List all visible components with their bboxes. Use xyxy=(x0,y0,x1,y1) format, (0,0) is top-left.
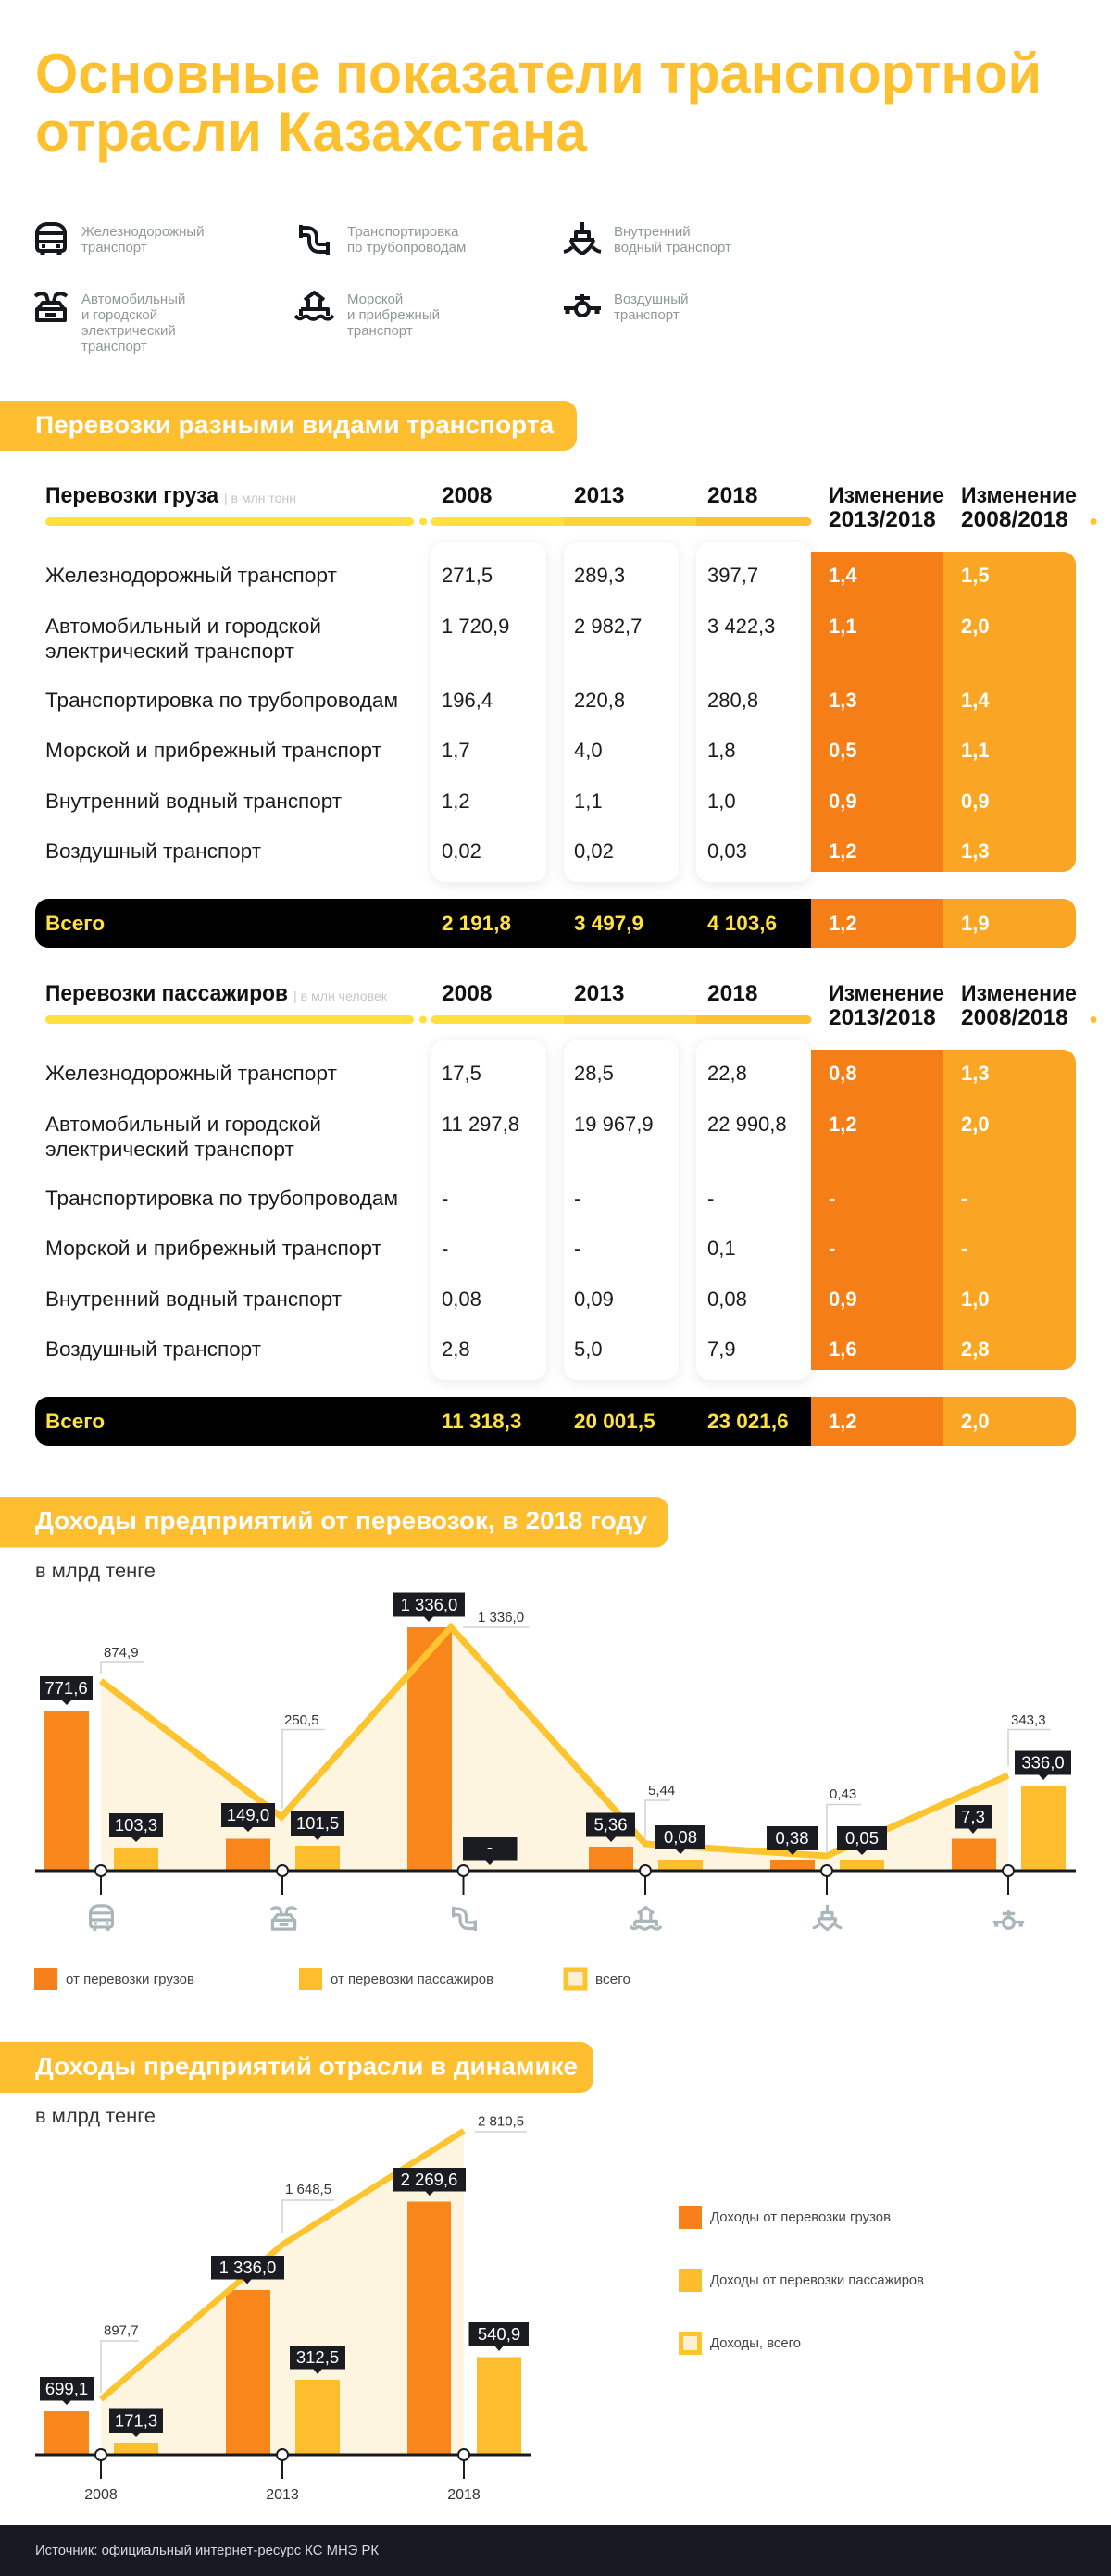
values 2018: - xyxy=(707,1187,714,1210)
row labels: электрический транспорт xyxy=(45,640,294,663)
table header: cargo: 2008 xyxy=(442,483,493,508)
row labels xyxy=(45,1062,398,1361)
table header: passengers: 2013/2018 xyxy=(829,1005,936,1030)
table header: passengers: Перевозки пассажиров xyxy=(45,981,288,1006)
row labels: Воздушный транспорт xyxy=(45,840,261,863)
legend: transport types xyxy=(35,222,731,355)
value tags: 1 336,0 xyxy=(219,2258,276,2277)
change columns xyxy=(811,1050,1076,1370)
footer: source xyxy=(0,2525,1111,2576)
legend item: railway: Железнодорожный xyxy=(81,224,205,240)
line: total xyxy=(101,1627,1008,1856)
values 2018: 0,08 xyxy=(707,1288,747,1311)
values 2013: 1,1 xyxy=(574,790,603,813)
chart legend: revenue 2018: от перевозки грузов xyxy=(66,1972,194,1987)
values 2013: 2 982,7 xyxy=(574,615,642,638)
area: total xyxy=(101,1627,1008,1871)
values 2008: - xyxy=(442,1237,448,1260)
legend item: railway xyxy=(37,224,205,255)
value tags: 312,5 xyxy=(296,2347,339,2367)
value tags: 0,38 xyxy=(775,1828,809,1848)
value tags: 540,9 xyxy=(478,2324,520,2344)
values 2008 xyxy=(442,1062,519,1361)
legend item: railway: транспорт xyxy=(81,240,147,255)
total row: passengers: Всего xyxy=(45,1410,105,1433)
values change 2008/2018: 2,0 xyxy=(961,615,990,638)
values 2013 xyxy=(574,1062,654,1361)
values 2008: 17,5 xyxy=(442,1062,481,1085)
value tags xyxy=(40,2168,529,2437)
total row: passengers: 2,0 xyxy=(961,1410,990,1433)
section heading: revenue 2018: Доходы предприятий от перевозок, в 2018 году xyxy=(35,1507,647,1535)
table header: passengers: Изменение xyxy=(961,981,1077,1006)
values 2013: - xyxy=(574,1187,580,1210)
table header: cargo: Перевозки груза xyxy=(45,483,218,508)
table header: cargo: 2013/2018 xyxy=(829,507,936,532)
callouts: totals: 897,7 xyxy=(104,2323,139,2338)
bars: cargo xyxy=(44,2201,451,2455)
values 2008: 271,5 xyxy=(442,564,493,587)
value tags: 1 336,0 xyxy=(401,1595,457,1614)
values change 2008/2018: 2,0 xyxy=(961,1113,990,1136)
values 2008: - xyxy=(442,1187,448,1210)
year columns xyxy=(431,1040,811,1380)
legend item: sea: Морской xyxy=(347,292,403,307)
total row: cargo xyxy=(35,899,1076,948)
table header: passengers: 2008/2018 xyxy=(961,1005,1068,1030)
line: total xyxy=(101,2131,464,2399)
values 2008: 0,08 xyxy=(442,1288,481,1311)
values 2018: 0,03 xyxy=(707,840,747,863)
values 2008: 11 297,8 xyxy=(442,1113,519,1136)
chart: revenue dynamics xyxy=(35,2114,531,2503)
values change 2013/2018: - xyxy=(829,1187,835,1210)
section heading: revenue 2018 xyxy=(0,1497,668,1548)
legend item: air xyxy=(564,292,688,323)
category icons xyxy=(91,1905,1024,1931)
year labels: 2013 xyxy=(266,2487,299,2503)
row labels: Железнодорожный транспорт xyxy=(45,564,337,587)
values change 2008/2018: 1,5 xyxy=(961,564,990,587)
callouts: totals: 874,9 xyxy=(104,1645,139,1661)
values 2013: 4,0 xyxy=(574,739,603,762)
table header: cargo: 2013 xyxy=(574,483,625,508)
title: отрасли Казахстана xyxy=(35,101,588,163)
callouts: totals: 250,5 xyxy=(284,1712,319,1728)
values change 2008/2018: 1,1 xyxy=(961,739,990,762)
total row: cargo: 4 103,6 xyxy=(707,912,777,935)
table header: cargo: Изменение xyxy=(961,483,1077,508)
section heading: transport by type: Перевозки разными видами транспорта xyxy=(35,411,555,439)
table header: passengers: Изменение xyxy=(829,981,944,1006)
legend item: inland water: Внутренний xyxy=(614,224,691,240)
chart legend: revenue dynamics xyxy=(679,2206,924,2353)
table header: passengers: | в млн человек xyxy=(293,989,387,1003)
legend item: road and electric: Автомобильный xyxy=(81,292,185,307)
values 2018: 22 990,8 xyxy=(707,1113,787,1136)
bars: passengers xyxy=(114,1786,1066,1871)
year labels xyxy=(84,2487,481,2503)
legend item: sea: и прибрежный xyxy=(347,307,440,323)
values 2008: 1,2 xyxy=(442,790,470,813)
row labels: Автомобильный и городской xyxy=(45,615,321,638)
callouts: totals: 5,44 xyxy=(648,1783,675,1798)
callouts: totals: 343,3 xyxy=(1011,1712,1046,1728)
legend item: road and electric: транспорт xyxy=(81,339,147,355)
section heading: revenue dynamics: Доходы предприятий отрасли в динамике xyxy=(35,2053,578,2081)
values 2008: 1,7 xyxy=(442,739,470,762)
values 2013: 28,5 xyxy=(574,1062,614,1085)
values change 2008/2018: 1,3 xyxy=(961,840,990,863)
values change 2008/2018: - xyxy=(961,1187,967,1210)
table: passengers xyxy=(35,981,1096,1446)
legend item: road and electric xyxy=(35,292,185,355)
callouts: totals: 1 336,0 xyxy=(478,1610,524,1625)
value tags: 149,0 xyxy=(227,1805,269,1824)
values 2018: 22,8 xyxy=(707,1062,747,1085)
row labels: Внутренний водный транспорт xyxy=(45,790,342,813)
values 2013: 0,09 xyxy=(574,1288,614,1311)
title xyxy=(35,43,1042,163)
chart: revenue 2018 xyxy=(35,1592,1076,1931)
values change 2013/2018: 0,9 xyxy=(829,1288,857,1311)
values 2008: 196,4 xyxy=(442,689,493,712)
chart legend: revenue 2018 xyxy=(34,1968,630,1990)
table header: cargo: | в млн тонн xyxy=(224,492,296,505)
values change 2008/2018: 1,0 xyxy=(961,1288,990,1311)
values change 2013/2018: 1,6 xyxy=(829,1338,857,1361)
values change 2013/2018: 0,5 xyxy=(829,739,857,762)
chart legend: revenue dynamics: Доходы, всего xyxy=(710,2336,801,2351)
values 2018 xyxy=(707,564,775,863)
legend item: inland water xyxy=(564,222,731,255)
legend item: sea: транспорт xyxy=(347,323,413,339)
value tags: 171,3 xyxy=(115,2410,157,2431)
callouts: totals xyxy=(101,1610,1051,1853)
value tags: 101,5 xyxy=(296,1813,339,1833)
legend item: road and electric: и городской xyxy=(81,307,157,323)
values 2018: 280,8 xyxy=(707,689,758,712)
values 2013: 5,0 xyxy=(574,1338,603,1361)
value tags: 0,05 xyxy=(845,1828,879,1848)
total row: passengers xyxy=(35,1397,1076,1446)
total row: passengers: 20 001,5 xyxy=(574,1410,655,1433)
values change 2013/2018: 0,8 xyxy=(829,1062,857,1085)
row labels: Морской и прибрежный транспорт xyxy=(45,1237,381,1260)
row labels: Воздушный транспорт xyxy=(45,1338,261,1361)
table header: cargo: Изменение xyxy=(829,483,944,508)
total row: passengers: 11 318,3 xyxy=(442,1410,521,1433)
total row: passengers: 1,2 xyxy=(829,1410,857,1433)
values change 2013/2018: 1,2 xyxy=(829,1113,857,1136)
bars: passengers xyxy=(114,2357,521,2455)
row labels: Автомобильный и городской xyxy=(45,1113,321,1136)
row labels xyxy=(45,564,398,863)
table header: cargo: 2018 xyxy=(707,483,758,508)
values change 2008/2018 xyxy=(961,564,990,863)
change columns xyxy=(811,552,1076,872)
value tags: 5,36 xyxy=(593,1814,628,1835)
year labels: 2018 xyxy=(447,2487,481,2503)
values change 2008/2018: - xyxy=(961,1237,967,1260)
values change 2013/2018: 1,3 xyxy=(829,689,857,712)
row labels: Морской и прибрежный транспорт xyxy=(45,739,381,762)
callouts: totals: 2 810,5 xyxy=(478,2114,524,2129)
values 2018: 0,1 xyxy=(707,1237,736,1260)
title: Основные показатели транспортной xyxy=(35,43,1042,105)
values 2018: 397,7 xyxy=(707,564,758,587)
legend item: inland water: водный транспорт xyxy=(614,240,731,255)
values change 2013/2018: 1,2 xyxy=(829,840,857,863)
values 2008: 0,02 xyxy=(442,840,481,863)
values 2008: 2,8 xyxy=(442,1338,470,1361)
table header: passengers: 2018 xyxy=(707,981,758,1006)
axis xyxy=(35,1865,1076,1895)
legend item: pipeline: по трубопроводам xyxy=(347,240,466,255)
values 2013: 220,8 xyxy=(574,689,625,712)
values 2018 xyxy=(707,1062,787,1361)
table: cargo xyxy=(35,483,1096,948)
table header: passengers: 2008 xyxy=(442,981,493,1006)
unit note: в млрд тенге xyxy=(35,1561,156,1582)
values change 2008/2018: 2,8 xyxy=(961,1338,990,1361)
values change 2013/2018: 1,4 xyxy=(829,564,857,587)
unit note: в млрд тенге xyxy=(35,2106,156,2127)
total row: cargo: 1,2 xyxy=(829,912,857,935)
legend item: air: Воздушный xyxy=(614,292,688,307)
values 2013: - xyxy=(574,1237,580,1260)
axis xyxy=(35,2449,531,2479)
values 2013: 289,3 xyxy=(574,564,625,587)
values 2013: 0,02 xyxy=(574,840,614,863)
value tags: - xyxy=(487,1837,493,1857)
values change 2013/2018: 1,1 xyxy=(829,615,857,638)
row labels: Транспортировка по трубопроводам xyxy=(45,1187,398,1210)
total row: cargo: 1,9 xyxy=(961,912,990,935)
year columns xyxy=(431,542,811,882)
values 2008: 1 720,9 xyxy=(442,615,509,638)
area: total xyxy=(101,2131,464,2455)
values change 2013/2018 xyxy=(829,1062,857,1361)
value tags: 2 269,6 xyxy=(401,2170,457,2189)
value tags: 336,0 xyxy=(1021,1753,1065,1772)
total row: passengers: 23 021,6 xyxy=(707,1410,789,1433)
table header: cargo: 2008/2018 xyxy=(961,507,1068,532)
table header: passengers: 2013 xyxy=(574,981,625,1006)
total row: cargo: 2 191,8 xyxy=(442,912,511,935)
row labels: Транспортировка по трубопроводам xyxy=(45,689,398,712)
values change 2013/2018: 0,9 xyxy=(829,790,857,813)
value tags: 699,1 xyxy=(45,2379,88,2398)
section heading: revenue dynamics xyxy=(0,2042,593,2093)
table header: cargo xyxy=(45,483,1096,532)
bars: cargo xyxy=(44,1627,996,1871)
callouts: totals xyxy=(101,2114,527,2393)
value tags: 103,3 xyxy=(115,1815,157,1835)
values change 2008/2018: 1,3 xyxy=(961,1062,990,1085)
values change 2013/2018 xyxy=(829,564,857,863)
table header: passengers xyxy=(45,981,1096,1030)
footer: source: Источник: официальный интернет-ресурс КС МНЭ РК xyxy=(35,2543,379,2558)
total row: cargo: 3 497,9 xyxy=(574,912,643,935)
callouts: totals: 0,43 xyxy=(830,1786,856,1802)
legend item: sea xyxy=(295,292,440,339)
values 2018: 1,8 xyxy=(707,739,736,762)
section heading: transport by type xyxy=(0,401,577,451)
value tags: 0,08 xyxy=(664,1827,697,1847)
chart legend: revenue dynamics: Доходы от перевозки пассажиров xyxy=(710,2273,924,2288)
values 2018: 1,0 xyxy=(707,790,736,813)
total row: cargo: Всего xyxy=(45,912,105,935)
chart legend: revenue 2018: от перевозки пассажиров xyxy=(331,1972,493,1987)
value tags xyxy=(40,1592,1071,1865)
values 2018: 7,9 xyxy=(707,1338,736,1361)
legend item: pipeline xyxy=(299,224,466,255)
values 2013 xyxy=(574,564,642,863)
legend item: pipeline: Транспортировка xyxy=(347,224,459,240)
values 2013: 19 967,9 xyxy=(574,1113,654,1136)
row labels: Внутренний водный транспорт xyxy=(45,1288,342,1311)
chart legend: revenue 2018: всего xyxy=(595,1972,630,1987)
value tags: 771,6 xyxy=(44,1678,88,1698)
row labels: Железнодорожный транспорт xyxy=(45,1062,337,1085)
callouts: totals: 1 648,5 xyxy=(285,2182,331,2197)
row labels: электрический транспорт xyxy=(45,1138,294,1161)
values 2008 xyxy=(442,564,509,863)
legend item: air: транспорт xyxy=(614,307,680,323)
value tags: 7,3 xyxy=(961,1807,985,1826)
values change 2008/2018: 1,4 xyxy=(961,689,990,712)
values change 2008/2018: 0,9 xyxy=(961,790,990,813)
values 2018: 3 422,3 xyxy=(707,615,775,638)
chart legend: revenue dynamics: Доходы от перевозки грузов xyxy=(710,2210,891,2225)
values change 2008/2018 xyxy=(961,1062,990,1361)
legend item: road and electric: электрический xyxy=(81,323,176,339)
year labels: 2008 xyxy=(84,2487,118,2503)
values change 2013/2018: - xyxy=(829,1237,835,1260)
